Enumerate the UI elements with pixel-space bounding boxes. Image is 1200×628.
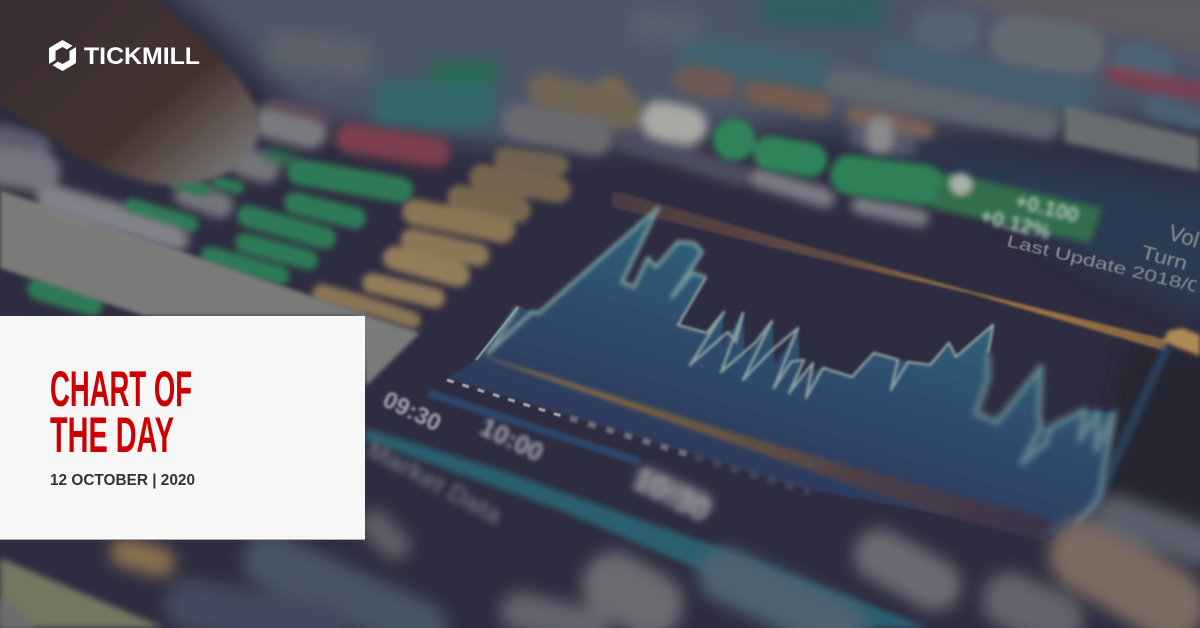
icon: hexagon mark bbox=[49, 40, 76, 71]
status pills and green badges bbox=[625, 119, 1200, 297]
lower teal band and blurred rows bbox=[0, 428, 1200, 628]
upper orange line bbox=[612, 192, 1168, 351]
heading: THE DAY bbox=[50, 407, 174, 463]
price chart bbox=[447, 192, 1200, 542]
panel: title card bbox=[0, 316, 365, 540]
large pale row bbox=[0, 190, 420, 386]
orange marker right bbox=[1163, 328, 1200, 356]
badge values: +0.100 bbox=[1013, 190, 1081, 228]
heading: CHART OF bbox=[50, 361, 192, 417]
time 10:30: 10:30 bbox=[627, 460, 716, 529]
dashed baseline bbox=[428, 393, 640, 462]
market data label: Market Data bbox=[362, 436, 507, 530]
time axis bbox=[362, 380, 810, 530]
last update caption: Last Update 2018/0 bbox=[1005, 231, 1200, 297]
chart area fill bbox=[447, 208, 1114, 538]
line series: left bbox=[488, 208, 706, 353]
right axis line bbox=[1088, 345, 1168, 520]
line series: right bbox=[976, 353, 1114, 525]
time 10:00: 10:00 bbox=[475, 411, 548, 468]
green ticker rows bbox=[38, 172, 400, 305]
red ticker rows bbox=[272, 104, 435, 152]
date: 12 OCTOBER | 2020 bbox=[50, 472, 195, 489]
lower orange line bbox=[470, 352, 1052, 542]
finger bbox=[0, 0, 260, 185]
turn label: Turn bbox=[1139, 243, 1190, 275]
badge values: +0.12% bbox=[978, 205, 1053, 244]
logo bbox=[49, 40, 200, 71]
left list: white rows bbox=[0, 135, 290, 230]
line series: middle bbox=[678, 277, 993, 398]
time 09:30: 09:30 bbox=[378, 386, 445, 437]
upper screen band bbox=[150, 0, 1200, 330]
orange price column bbox=[322, 158, 558, 320]
badge values bbox=[978, 190, 1081, 244]
wordmark: TICKMILL bbox=[84, 43, 200, 70]
heading bbox=[50, 361, 192, 463]
